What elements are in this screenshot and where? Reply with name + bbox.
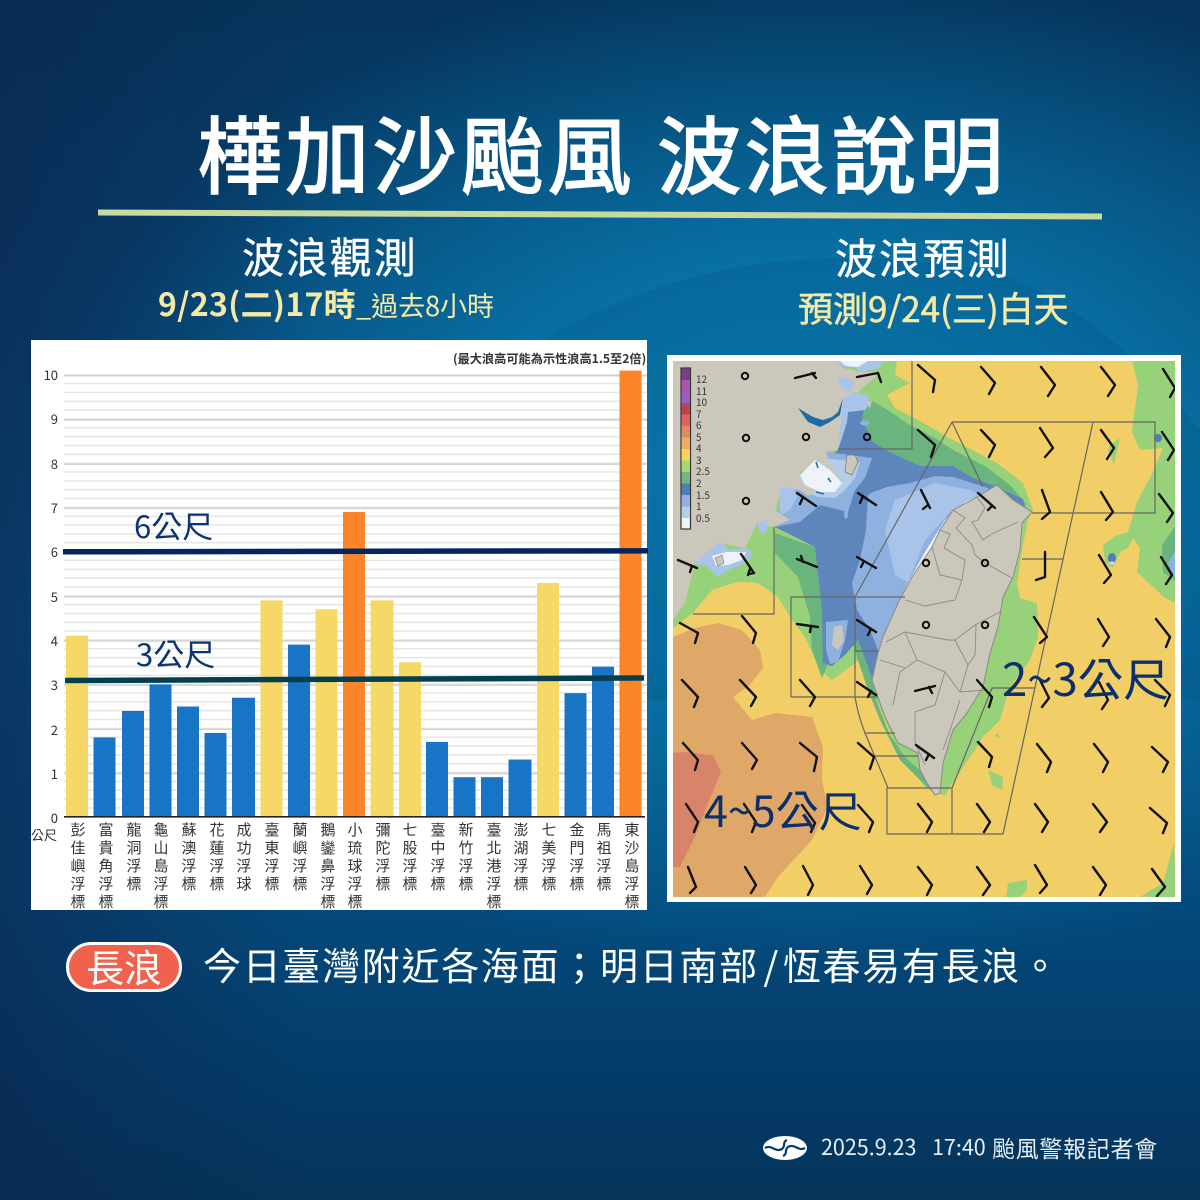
Taiwan county borders bbox=[880, 497, 1018, 765]
footer date and event bbox=[821, 1130, 1158, 1164]
Penghu islands bbox=[832, 625, 844, 650]
y axis labels: 8 bbox=[51, 454, 58, 473]
y axis labels: 10 bbox=[44, 365, 58, 384]
threshold label: 3 m: 3公尺 bbox=[136, 630, 215, 675]
station labels bbox=[68, 821, 642, 912]
y axis labels: 6 bbox=[51, 542, 58, 561]
map frame bbox=[667, 355, 1181, 902]
station labels: 七股浮標 bbox=[400, 822, 420, 894]
station labels: 鵝鑾鼻浮標 bbox=[318, 822, 338, 912]
land: Taiwan bbox=[872, 485, 1032, 795]
sea: 1.5-2 m zones bbox=[775, 398, 1026, 700]
wave height legend: 1 bbox=[696, 498, 702, 513]
y axis labels: 5 bbox=[51, 587, 58, 606]
wave height legend: 5 bbox=[696, 429, 702, 444]
long swell badge bbox=[66, 942, 182, 992]
title: 樺加沙颱風 波浪說明 bbox=[198, 91, 1007, 212]
y axis labels bbox=[44, 365, 58, 827]
footer date and event: 颱風警報記者會 bbox=[992, 1130, 1158, 1164]
background wave bbox=[570, 269, 981, 642]
wave height legend: 0.5 bbox=[696, 510, 710, 525]
station labels: 蘇澳浮標 bbox=[178, 822, 200, 894]
calm markers bbox=[742, 373, 988, 628]
sea: 2.5-3 m zones bbox=[673, 360, 1176, 897]
heading: wave forecast: 波浪預測 bbox=[835, 226, 1011, 287]
wave height legend: 1.5 bbox=[696, 487, 710, 502]
chart background bbox=[31, 340, 647, 910]
sea: 3-4 m base bbox=[673, 361, 1175, 897]
sea: 5-6 m zone bbox=[673, 752, 721, 867]
long swell description: 今日臺灣附近各海面；明日南部 恆春易有長浪。 bbox=[203, 936, 1061, 991]
footer date and event: 2025.9.23 bbox=[821, 1131, 916, 1162]
long swell badge: 長浪 bbox=[86, 938, 162, 993]
bars bbox=[66, 371, 642, 817]
wave height legend: 4 bbox=[696, 440, 702, 455]
wave height legend: 2 bbox=[696, 475, 702, 490]
sea: 1-1.5 m zones bbox=[852, 476, 1003, 650]
sea: 4-5 m zone bbox=[673, 623, 828, 897]
wave height legend: 10 bbox=[696, 394, 708, 409]
panel: wave forecast map bbox=[667, 355, 1181, 902]
wave height legend: 7 bbox=[696, 406, 702, 421]
map label: 4~5 m: 4~5公尺 bbox=[704, 778, 862, 840]
station labels: 彌陀浮標 bbox=[372, 822, 394, 894]
footer date and event: 17:40 bbox=[932, 1131, 986, 1162]
station labels: 成功浮球 bbox=[234, 822, 254, 894]
station labels: 富貴角浮標 bbox=[96, 821, 116, 912]
wave height legend: 12 bbox=[696, 371, 708, 386]
y axis labels: 2 bbox=[51, 720, 58, 739]
station labels: 金門浮標 bbox=[566, 822, 588, 894]
sea: coastal light water bbox=[905, 498, 975, 588]
station labels: 小琉球浮標 bbox=[344, 822, 366, 912]
wave height legend: 2.5 bbox=[696, 463, 710, 478]
threshold line: 6 m bbox=[63, 551, 648, 552]
y axis labels: 3 bbox=[51, 675, 58, 694]
station labels: 馬祖浮標 bbox=[594, 822, 614, 894]
wave height legend bbox=[681, 368, 710, 529]
station labels: 新竹浮標 bbox=[456, 822, 476, 894]
station labels: 臺東浮標 bbox=[262, 822, 282, 894]
shallow band along China coast bbox=[775, 452, 872, 527]
station labels: 七美浮標 bbox=[538, 822, 560, 894]
coastal shallows bbox=[693, 360, 883, 577]
title underline bbox=[98, 210, 1102, 220]
map label: 2~3 m: 2~3公尺 bbox=[1002, 644, 1169, 710]
land: Chinese mainland bbox=[673, 361, 882, 620]
subheading: forecast time: 預測9/24(三)白天 bbox=[798, 282, 1069, 333]
station labels: 澎湖浮標 bbox=[510, 822, 532, 894]
y axis labels: 9 bbox=[51, 409, 58, 428]
heading: wave observation: 波浪觀測 bbox=[242, 225, 418, 286]
wave height legend: 11 bbox=[696, 383, 707, 398]
chart note: (最大浪高可能為示性浪高1.5至2倍) bbox=[453, 349, 646, 367]
subheading: observation time: 9/23(二)17時_過去8小時 bbox=[158, 280, 494, 326]
forecast zone boundaries bbox=[693, 361, 1155, 834]
wave height legend: 3 bbox=[696, 452, 702, 467]
sea: 2-2.5 m zones bbox=[775, 398, 1176, 793]
station labels: 臺北港浮標 bbox=[484, 822, 504, 912]
y axis labels: 0 bbox=[51, 808, 58, 827]
station labels: 蘭嶼浮標 bbox=[290, 822, 310, 894]
station labels: 東沙島浮標 bbox=[622, 822, 642, 912]
long swell description: / bbox=[763, 936, 778, 991]
y axis labels: 7 bbox=[51, 498, 58, 517]
station labels: 臺中浮標 bbox=[428, 822, 448, 894]
sea: small shoals bbox=[1108, 434, 1162, 563]
threshold label: 6 m: 6公尺 bbox=[134, 502, 213, 547]
threshold line: 3 m bbox=[65, 678, 644, 680]
y axis unit: 公尺 bbox=[31, 825, 57, 844]
station labels: 彭佳嶼浮標 bbox=[68, 822, 88, 912]
station labels: 龜山島浮標 bbox=[150, 822, 172, 912]
estuary bbox=[798, 398, 843, 427]
x axis bbox=[64, 816, 645, 818]
station labels: 花蓮浮標 bbox=[206, 822, 228, 894]
land: offshore islands bbox=[845, 455, 858, 475]
y axis labels: 1 bbox=[51, 764, 58, 783]
y axis labels: 4 bbox=[51, 631, 58, 650]
wave height legend: 6 bbox=[696, 417, 702, 432]
wind barbs bbox=[678, 365, 1175, 896]
station labels: 龍洞浮標 bbox=[124, 822, 144, 894]
footer agency logo bbox=[763, 1136, 807, 1160]
